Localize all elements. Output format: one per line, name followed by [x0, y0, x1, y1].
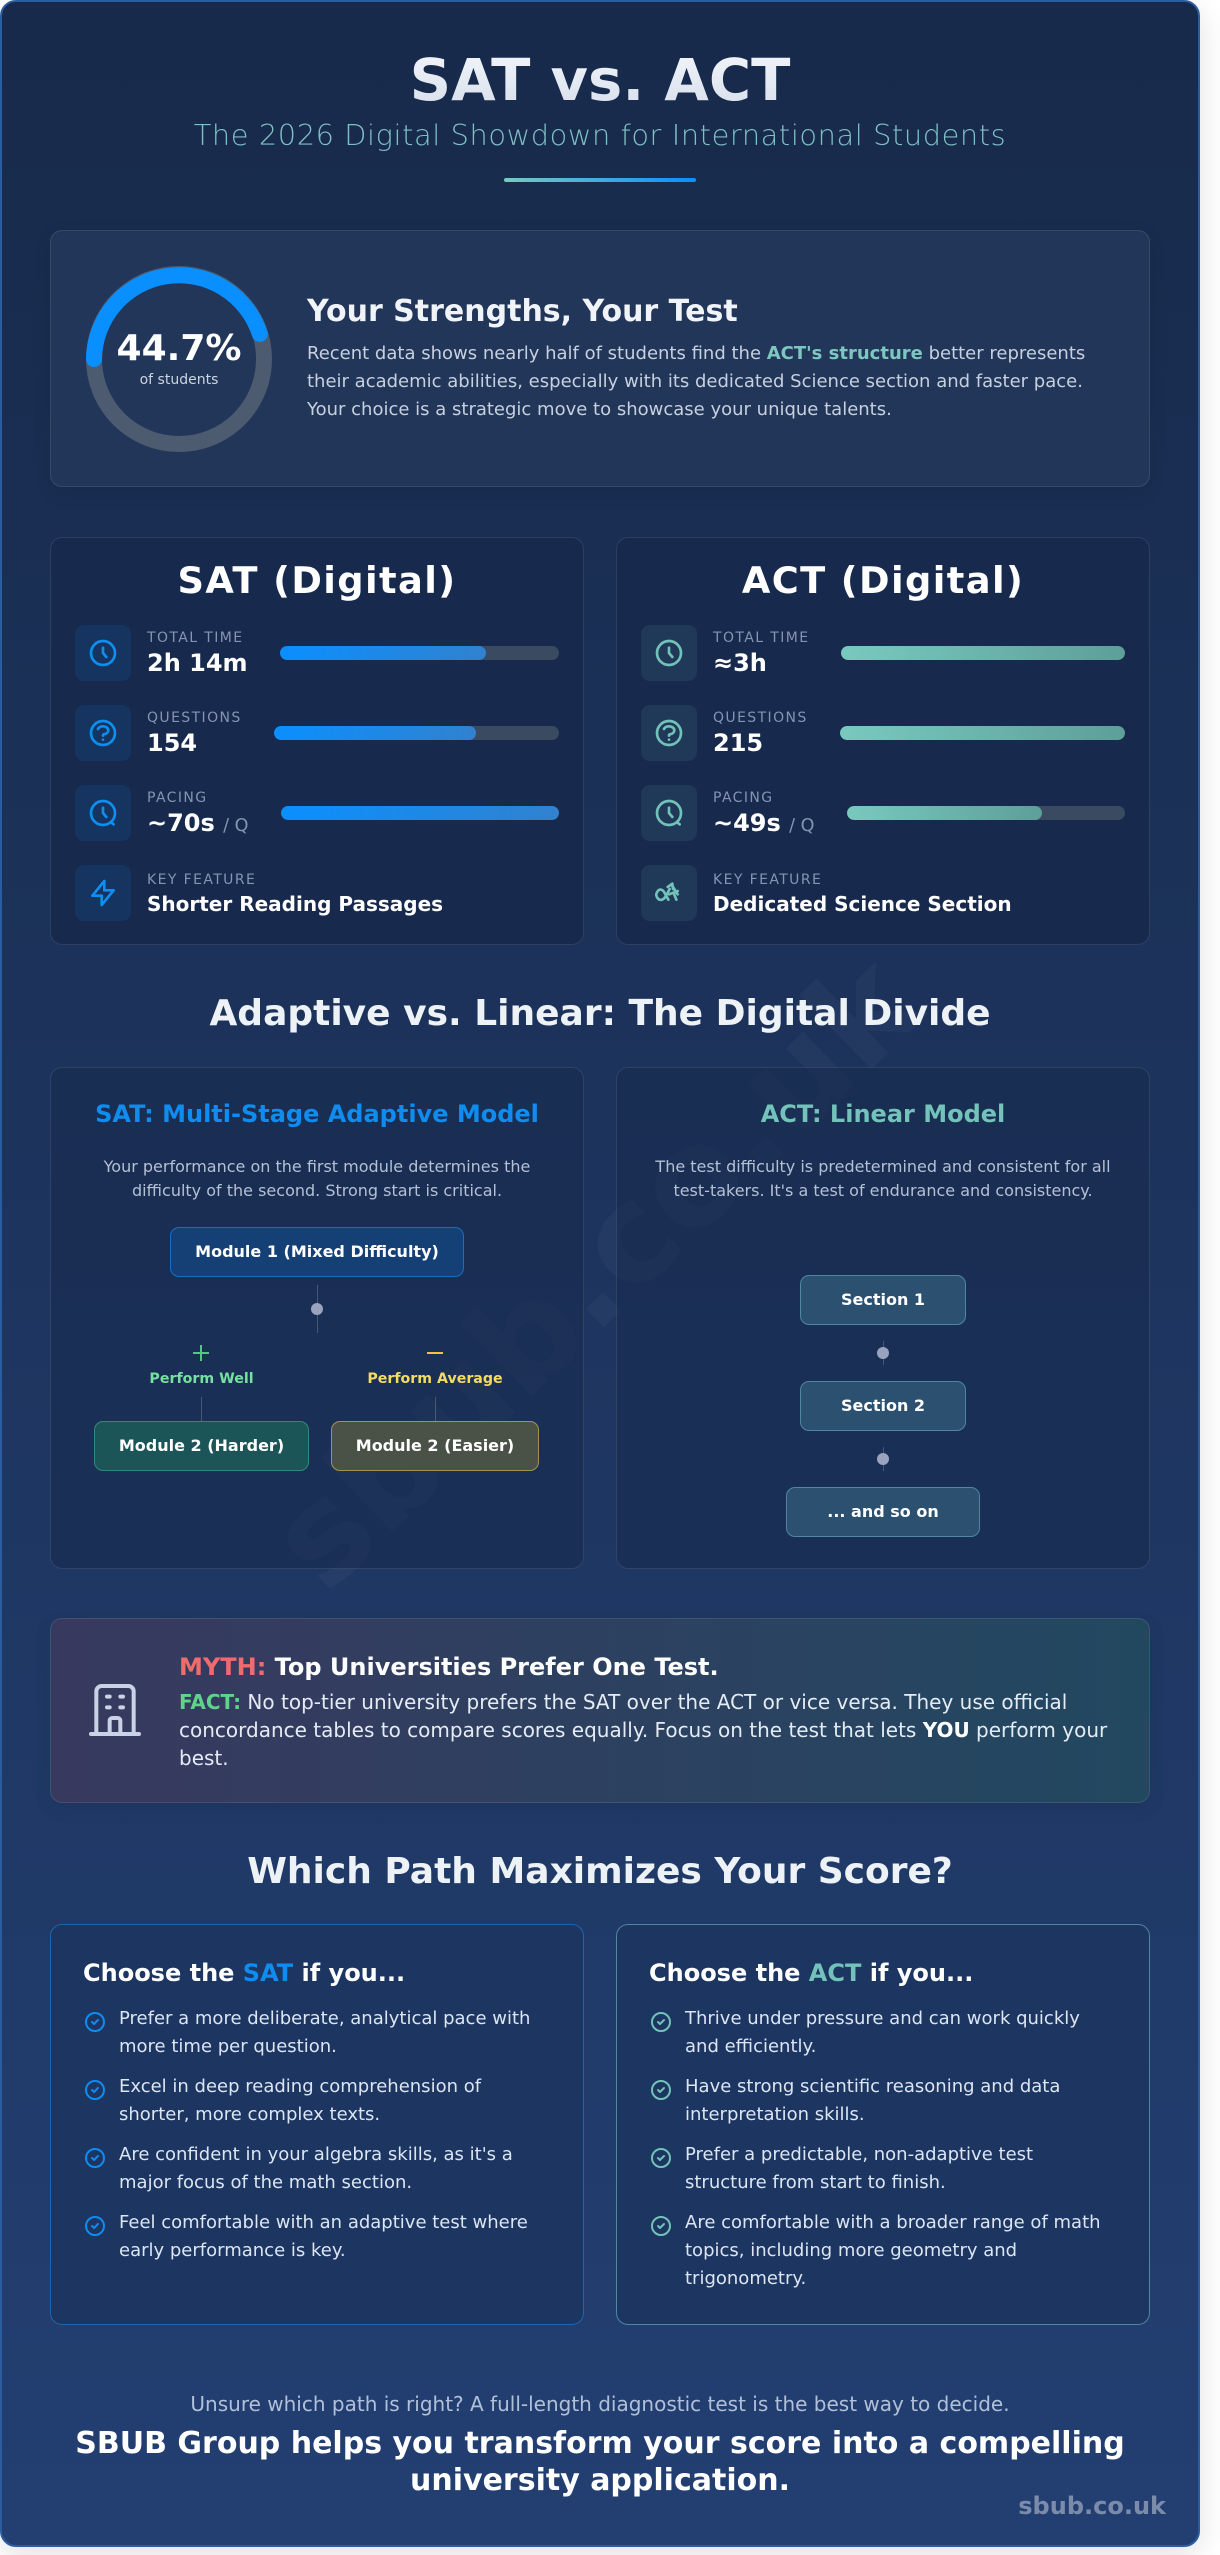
panel: ACT linear model [616, 1067, 1150, 1569]
item 1 [649, 2005, 1129, 2061]
text: Have strong scientific reasoning and data [685, 2076, 1060, 2097]
connector [311, 1285, 323, 1333]
fact text: FACT: No top-tier university prefers the SAT over the ACT or vice versa. They use official [179, 1690, 1067, 1714]
branch: perform well [94, 1345, 309, 1471]
branch: perform average [331, 1352, 539, 1471]
section 1: Section 1 [841, 1290, 925, 1309]
SAT model description [104, 1157, 530, 1200]
ACT model description: The test difficulty is predetermined and consistent for all [655, 1157, 1111, 1176]
row: questions [641, 705, 1125, 761]
flow diagram: linear [786, 1275, 980, 1537]
text: trigonometry. [685, 2268, 806, 2289]
hero paragraph: Recent data shows nearly half of students find the ACT's structure better represents [307, 343, 1085, 364]
section 2: Section 2 [841, 1396, 925, 1415]
section 1 [800, 1275, 966, 1325]
footer call to action: university application. [410, 2463, 790, 2498]
item 3 [85, 2144, 513, 2193]
hero paragraph [307, 343, 1085, 420]
text [685, 2209, 1101, 2293]
text: Thrive under pressure and can work quickly [685, 2008, 1080, 2029]
text: Are comfortable with a broader range of math [685, 2212, 1101, 2233]
ACT model title: ACT: Linear Model [761, 1100, 1005, 1128]
ACT model description: test-takers. It's a test of endurance and consistency. [673, 1181, 1093, 1200]
row: total time [641, 625, 1125, 681]
value: ≈3h [713, 649, 767, 677]
item 1 [85, 2008, 530, 2057]
footer call to action [0, 2425, 1200, 2499]
donut caption: of students [140, 372, 218, 388]
item 2 [85, 2076, 482, 2125]
footer prompt: Unsure which path is right? A full-length diagnostic test is the best way to decide. [190, 2392, 1010, 2416]
row: pacing [641, 785, 1125, 841]
value: ~49s / Q [713, 809, 815, 837]
connector line [435, 1397, 436, 1421]
hero heading: Your Strengths, Your Test [307, 294, 738, 329]
module 2 harder [94, 1421, 309, 1471]
footer call to action: SBUB Group helps you transform your score into a compelling [75, 2426, 1125, 2461]
text: interpretation skills. [685, 2104, 865, 2125]
item 4 [85, 2212, 528, 2261]
check icon [649, 2146, 673, 2170]
icon: question [75, 705, 131, 761]
hero paragraph: their academic abilities, especially with its dedicated Science section and faster pace. [307, 371, 1083, 392]
icon: university building [89, 1684, 141, 1736]
section heading: which path: Which Path Maximizes Your Score? [247, 1851, 953, 1892]
label: KEY FEATURE [713, 872, 822, 888]
check icon [85, 2216, 105, 2236]
title [0, 47, 1200, 115]
panel: SAT adaptive model [50, 1067, 584, 1569]
check icon [85, 2080, 105, 2100]
module 1: Module 1 (Mixed Difficulty) [195, 1242, 439, 1261]
panel: myth vs fact [50, 1618, 1150, 1803]
donut chart: 44.7% [86, 266, 272, 452]
icon: lightning [75, 865, 131, 921]
value: Dedicated Science Section [713, 892, 1012, 916]
connector [877, 1447, 889, 1471]
icon: clock [641, 625, 697, 681]
text: major focus of the math section. [119, 2172, 412, 2193]
item 2 [649, 2073, 1129, 2129]
panel: ACT digital stats [616, 537, 1150, 945]
text: more time per question. [119, 2036, 337, 2057]
icon: pacing clock [641, 785, 697, 841]
text: early performance is key. [119, 2240, 346, 2261]
text: Prefer a predictable, non-adaptive test [685, 2144, 1033, 2165]
text [685, 2073, 1060, 2129]
panel: SAT digital stats [50, 537, 584, 945]
text: Feel comfortable with an adaptive test where [119, 2212, 528, 2233]
module 2 easier [331, 1421, 539, 1471]
icon: science [641, 865, 697, 921]
item 4 [649, 2209, 1129, 2293]
text [119, 2008, 530, 2057]
text: Prefer a more deliberate, analytical pace with [119, 2008, 530, 2029]
text [119, 2144, 513, 2193]
text [119, 2076, 482, 2125]
row: key feature [75, 865, 443, 921]
watermark: sbub.co.uk [239, 924, 951, 1620]
fact text: best. [179, 1746, 229, 1770]
SAT model title: SAT: Multi-Stage Adaptive Model [95, 1100, 539, 1128]
bar [274, 726, 559, 740]
label: Perform Average [367, 1371, 503, 1387]
fact text: concordance tables to compare scores equally. Focus on the test that lets YOU perform your [179, 1718, 1107, 1742]
ACT model description [655, 1157, 1111, 1200]
bar [840, 726, 1125, 740]
text: shorter, more complex texts. [119, 2104, 380, 2125]
check icon [649, 2214, 673, 2238]
check icon [649, 2010, 673, 2034]
row: total time [75, 625, 559, 681]
text: topics, including more geometry and [685, 2240, 1017, 2261]
text: Are confident in your algebra skills, as it's a [119, 2144, 513, 2165]
plus sign [193, 1345, 209, 1361]
connector line [201, 1397, 202, 1421]
ACT heading: ACT (Digital) [742, 559, 1024, 602]
panel: your strengths [50, 230, 1150, 487]
item 3 [649, 2141, 1129, 2197]
icon: question [641, 705, 697, 761]
title: SAT vs. ACT [410, 47, 790, 114]
check icon [85, 2148, 105, 2168]
checklist: SAT [85, 2008, 530, 2261]
connector [877, 1341, 889, 1365]
accent divider [504, 178, 696, 182]
row: pacing [75, 785, 559, 841]
label: QUESTIONS [713, 710, 808, 726]
module 2 harder: Module 2 (Harder) [119, 1436, 284, 1455]
value: ~70s / Q [147, 809, 249, 837]
text: and efficiently. [685, 2036, 816, 2057]
row: key feature [641, 865, 1012, 921]
value: 2h 14m [147, 649, 248, 677]
bar [281, 806, 559, 820]
row: questions [75, 705, 559, 761]
minus sign [427, 1352, 443, 1354]
text [685, 2005, 1080, 2061]
SAT heading: SAT (Digital) [177, 559, 456, 602]
icon: pacing clock [75, 785, 131, 841]
text: Excel in deep reading comprehension of [119, 2076, 481, 2097]
and so on [786, 1487, 980, 1537]
text: structure from start to finish. [685, 2172, 946, 2193]
and so on: ... and so on [827, 1502, 939, 1521]
label: TOTAL TIME [713, 630, 809, 646]
value: 215 [713, 729, 763, 757]
choose SAT heading: Choose the SAT if you... [83, 1959, 405, 1987]
flow diagram: adaptive [94, 1227, 539, 1471]
checklist: ACT [649, 2005, 1129, 2293]
text [119, 2209, 528, 2265]
SAT model description: Your performance on the first module determines the [104, 1157, 530, 1176]
header [194, 47, 1006, 182]
value: 154 [147, 729, 197, 757]
module 2 easier: Module 2 (Easier) [356, 1436, 514, 1455]
bar [847, 806, 1125, 820]
hero paragraph: Your choice is a strategic move to showcase your unique talents. [307, 399, 892, 420]
label: TOTAL TIME [147, 630, 243, 646]
value: Shorter Reading Passages [147, 892, 443, 916]
donut value: 44.7% [117, 328, 241, 369]
panel: choose ACT [616, 1924, 1150, 2325]
icon: clock [75, 625, 131, 681]
label: QUESTIONS [147, 710, 242, 726]
module 1 [170, 1227, 464, 1277]
label: KEY FEATURE [147, 872, 256, 888]
fact text [179, 1690, 1108, 1770]
check icon [649, 2078, 673, 2102]
brand mark: sbub.co.uk [1018, 2492, 1166, 2520]
myth heading: MYTH: Top Universities Prefer One Test. [179, 1653, 719, 1681]
section heading: adaptive vs linear: Adaptive vs. Linear: The Digital Divide [209, 993, 991, 1034]
bar [841, 646, 1125, 660]
panel: choose SAT [50, 1924, 584, 2325]
SAT model description: difficulty of the second. Strong start is critical. [132, 1181, 502, 1200]
label: PACING [147, 790, 208, 806]
section 2 [800, 1381, 966, 1431]
text [685, 2141, 1033, 2197]
choose ACT heading: Choose the ACT if you... [649, 1959, 973, 1987]
label: Perform Well [149, 1371, 254, 1387]
subtitle: The 2026 Digital Showdown for International Students [194, 118, 1006, 152]
label: PACING [713, 790, 774, 806]
footer [0, 2385, 1200, 2525]
bar [280, 646, 559, 660]
check icon [85, 2012, 105, 2032]
